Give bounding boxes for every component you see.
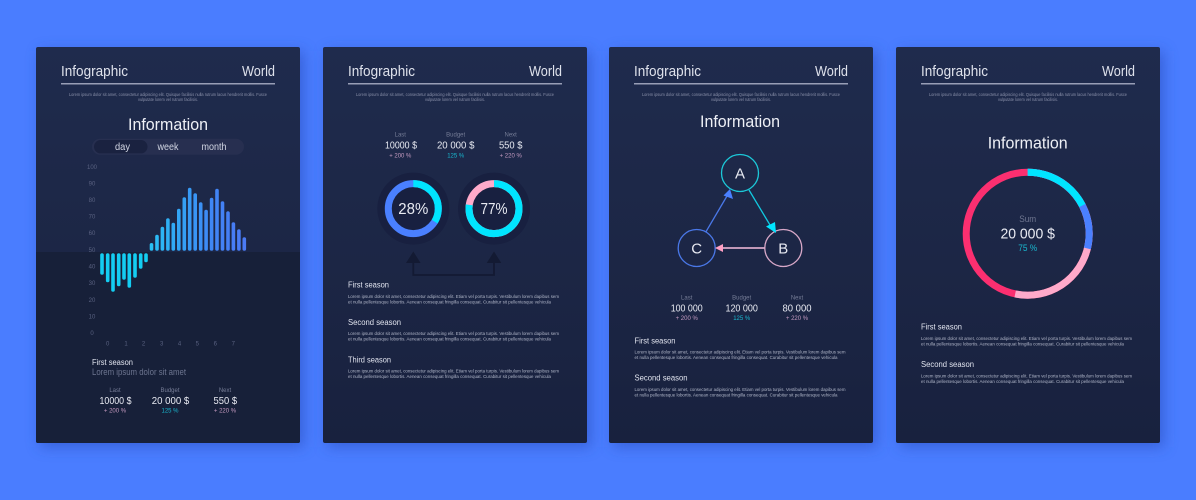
section: first season: et nulla pellentesque lobortis. Aenean consequat fringilla consequat. Curabitur sit pellentesque vehicula [348,300,552,305]
section: first season: Lorem ipsum dolor sit amet, consectetur adipiscing elit. Etiam vel porta turpis. Vestibulum lorem dapibus sem [921,336,1133,341]
stat: last: Last [395,133,406,139]
stat: next: + 220 % [500,153,522,159]
ring center label: Sum [1019,214,1036,224]
stat: last: Last [681,295,693,301]
stat: budget: Budget [160,388,180,394]
y axis labels [87,165,98,337]
stat: last: Last [109,388,121,394]
panel 2 intro text: Lorem ipsum dolor sit amet, consectetur adipiscing elit. Quisque facilisis nulla rutrum lacus hendrerit mollis. Fusce [356,92,555,97]
x axis labels: 3 [160,342,164,348]
panel 1 intro text [69,92,268,102]
panel 3 intro text: Lorem ipsum dolor sit amet, consectetur adipiscing elit. Quisque facilisis nulla rutrum lacus hendrerit mollis. Fusce [642,92,841,97]
section: first season [634,336,846,360]
tab switcher: day week month: month [202,142,226,153]
stat: last [671,295,703,322]
panel 2 heading [348,63,562,84]
section: second season: Second season [634,374,688,383]
stat: budget [437,133,475,159]
stat: last: + 200 % [389,153,412,159]
stat: last: + 200 % [104,409,127,415]
stat: next [499,133,523,159]
panel: ABC cycle diagram [609,47,877,447]
section: first season: et nulla pellentesque lobortis. Aenean consequat fringilla consequat. Curabitur sit pellentesque vehicula [921,342,1125,347]
ring center label [1000,214,1056,253]
donut: 28%: 28% [398,201,428,218]
y axis labels: 0 [90,331,94,337]
stat: budget: Budget [732,295,752,301]
stat: last: 10000 $ [385,139,417,151]
panel 1 heading: World [242,63,275,80]
section: first season: et nulla pellentesque lobortis. Aenean consequat fringilla consequat. Curabitur sit pellentesque vehicula [634,355,838,360]
section: second season: Lorem ipsum dolor sit amet, consectetur adipiscing elit. Etiam vel porta turpis. Vestibulum lorem dapibus sem [921,373,1133,378]
section: first season: Lorem ipsum dolor sit amet, consectetur adipiscing elit. Etiam vel porta turpis. Vestibulum lorem dapibus sem [634,350,846,355]
section: first season [921,323,1133,347]
stat: budget: 20 000 $ [152,395,189,407]
section: third season: et nulla pellentesque lobortis. Aenean consequat fringilla consequat. Curabitur sit pellentesque vehicula [348,374,552,379]
panel 4 intro text: vulputate lorem vel rutrum facilisis. [998,97,1058,102]
section: third season: Lorem ipsum dolor sit amet, consectetur adipiscing elit. Etiam vel porta turpis. Vestibulum lorem dapibus sem [348,368,560,373]
panel 2 intro text [356,92,555,102]
stat: next: + 220 % [786,316,809,322]
panel 1 title: Information [128,115,208,134]
section: third season: Third season [348,355,391,364]
stat: next [214,388,237,415]
tab switcher: day week month: week [157,142,179,153]
stat: next: + 220 % [214,409,237,415]
caption: first season: Lorem ipsum dolor sit amet [92,367,186,377]
bar chart: negative bars [102,255,146,290]
node: B [765,230,802,266]
stat: budget: 20 000 $ [437,139,475,151]
panel 1 intro text: Lorem ipsum dolor sit amet, consectetur adipiscing elit. Quisque facilisis nulla rutrum lacus hendrerit mollis. Fusce [69,92,268,97]
stat: budget [152,388,189,415]
x axis labels: 6 [214,342,218,348]
stat: budget: Budget [446,133,466,139]
caption: first season [92,358,186,377]
stat: last: 10000 $ [100,395,132,407]
arrow: C to A [706,189,733,232]
y axis labels: 30 [89,281,96,287]
panel 4 heading [921,63,1135,84]
donut: 77%: 77% [480,201,508,218]
section: first season: First season [348,281,389,290]
x axis labels: 2 [142,342,146,348]
tab switcher: day week month: day [115,142,130,153]
y axis labels: 60 [89,231,96,237]
stat: budget: 120 000 [725,302,758,314]
section: second season: et nulla pellentesque lobortis. Aenean consequat fringilla consequat. Curabitur sit pellentesque vehicula [348,337,552,342]
y axis labels: 90 [89,182,96,188]
stat: budget: 125 % [161,409,179,415]
stat: budget: 125 % [733,316,751,322]
x axis labels: 5 [196,342,200,348]
panel: sum ring chart [896,47,1164,447]
stat: last: + 200 % [676,316,698,322]
panel: percentage donuts [323,47,591,447]
stat: last: 100 000 [671,302,703,314]
panel 1 heading: Infographic [61,63,128,80]
panel 4 intro text: Lorem ipsum dolor sit amet, consectetur adipiscing elit. Quisque facilisis nulla rutrum lacus hendrerit mollis. Fusce [929,92,1128,97]
section: second season [348,318,560,342]
section: first season: First season [921,323,962,332]
stat: next: Next [791,295,803,301]
panel 3 title: Information [700,112,780,131]
x axis labels: 7 [232,342,236,348]
section: second season: Second season [348,318,401,327]
panel: daily bar chart [36,47,304,447]
section: second season: Lorem ipsum dolor sit amet, consectetur adipiscing elit. Etiam vel porta turpis. Vestibulum lorem dapibus sem [348,331,560,336]
node: C [678,230,715,266]
stat: next: Next [505,133,517,139]
panel 3 intro text: vulputate lorem vel rutrum facilisis. [711,97,771,102]
caption: first season: First season [92,358,133,367]
y axis labels: 50 [89,248,96,254]
panel 2 heading: Infographic [348,63,415,80]
section: second season: et nulla pellentesque lobortis. Aenean consequat fringilla consequat. Curabitur sit pellentesque vehicula [921,379,1125,384]
x axis labels [106,342,236,348]
stat: budget [725,295,758,322]
y axis labels: 80 [89,198,96,204]
x axis labels: 0 [106,342,110,348]
panel 2 intro text: vulputate lorem vel rutrum facilisis. [425,97,485,102]
y axis labels: 100 [87,165,98,171]
stat: budget: 125 % [447,153,465,159]
arrow: A to B [749,190,776,233]
donut: 77% [458,173,530,245]
stat: next: 80 000 [782,302,812,314]
section: first season [348,281,560,305]
stat: next: 550 $ [499,139,523,151]
panel 1 intro text: vulputate lorem vel rutrum facilisis. [138,97,198,102]
donut: 28% [377,173,449,245]
panel 4 heading: Infographic [921,63,988,80]
tab switcher: day week month [92,139,244,155]
node: A: A [735,166,745,182]
node: C: C [691,240,702,258]
y axis labels: 10 [89,314,96,320]
panel 4 heading: World [1102,63,1135,80]
stat: last [385,133,417,159]
panel 2 heading: World [529,63,562,80]
stat: last [100,388,132,415]
panel 3 intro text [642,92,841,102]
panel 4 title: Information [988,134,1068,152]
panel 1 heading [61,63,275,84]
bar chart: positive bars [152,190,244,249]
panel 3 heading: World [815,63,848,80]
arrow: linking both donuts [406,252,501,275]
node: A [722,154,758,192]
section: first season: First season [634,336,676,345]
x axis labels: 4 [178,342,182,348]
section: second season: Lorem ipsum dolor sit amet, consectetur adipiscing elit. Etiam vel porta turpis. Vestibulum lorem dapibus sem [634,387,846,392]
y axis labels: 40 [89,265,96,271]
ring center label: 20 000 $ [1000,226,1056,242]
node: B: B [778,240,788,258]
panel 3 heading [634,63,848,84]
y axis labels: 20 [89,298,96,304]
panel 4 intro text [929,92,1128,102]
section: first season: Lorem ipsum dolor sit amet, consectetur adipiscing elit. Etiam vel porta turpis. Vestibulum lorem dapibus sem [348,294,560,299]
x axis labels: 1 [124,342,128,348]
section: third season [348,355,560,379]
section: second season: et nulla pellentesque lobortis. Aenean consequat fringilla consequat. Curabitur sit pellentesque vehicula [634,392,838,398]
section: second season [634,374,846,398]
section: second season [921,360,1133,384]
stat: next: Next [219,388,231,394]
stat: next [782,295,812,322]
panel 3 heading: Infographic [634,63,701,80]
y axis labels: 70 [89,215,96,221]
stat: next: 550 $ [214,395,237,407]
section: second season: Second season [921,360,974,369]
arrow: B to C [715,244,765,252]
ring center label: 75 % [1018,243,1037,253]
ring chart [966,172,1089,295]
